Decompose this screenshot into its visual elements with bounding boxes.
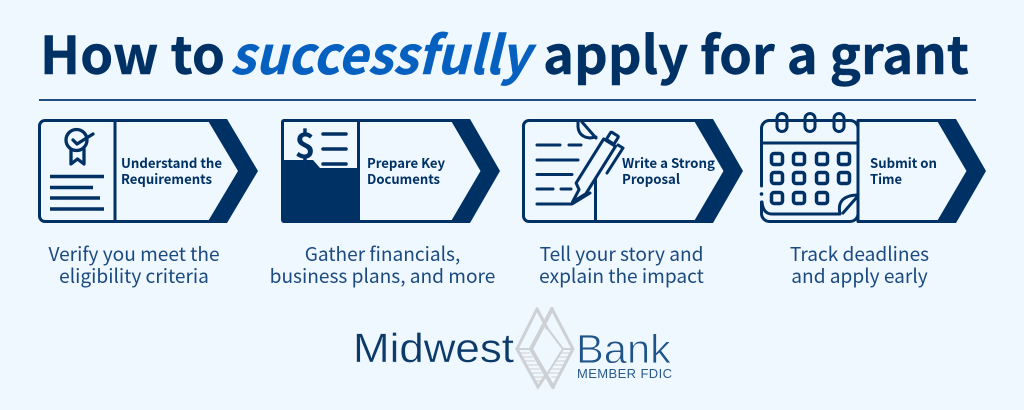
- label: understand the requirements: Requirements: [121, 168, 212, 188]
- arrow: step 3 chevron: [693, 119, 743, 223]
- caption: gather financials: Gather financials,: [305, 239, 460, 267]
- label: write a strong proposal: Write a Strong: [622, 152, 715, 172]
- panel: understand the requirements: [40, 119, 258, 223]
- title: apply for a grant: [543, 14, 969, 89]
- arrow: step 2 chevron: [450, 119, 500, 223]
- caption: tell your story: Tell your story and: [540, 239, 703, 267]
- panel: write a strong proposal: [524, 119, 743, 223]
- icon: document and pen: [537, 122, 623, 206]
- logo mark: double diamond: [517, 309, 573, 387]
- logo: Midwest Bank: Bank: [576, 326, 672, 372]
- label: submit on time: Time: [870, 168, 902, 188]
- icon: folder with dollar document: $: [295, 118, 315, 169]
- label: write a strong proposal: Proposal: [622, 168, 680, 188]
- icon: certificate with ribbon badge: [50, 130, 104, 209]
- caption: verify eligibility: eligibility criteria: [59, 261, 209, 289]
- caption: track deadlines: Track deadlines: [790, 239, 929, 267]
- label: understand the requirements: Understand the: [121, 152, 222, 172]
- title: successfully: [230, 14, 537, 89]
- panel: prepare key documents: [281, 118, 500, 223]
- title: [40, 14, 969, 89]
- icon: calendar: [760, 114, 858, 222]
- logo: Midwest Bank: MEMBER FDIC: [577, 366, 672, 381]
- caption: verify eligibility: Verify you meet the: [48, 239, 220, 267]
- icon: folder with dollar document: [281, 118, 360, 223]
- logo: Midwest Bank: Midwest: [353, 325, 514, 371]
- caption: track deadlines: and apply early: [791, 261, 928, 289]
- title: How to: [40, 14, 225, 89]
- label: prepare key documents: Prepare Key: [367, 152, 445, 172]
- label: submit on time: Submit on: [870, 152, 937, 172]
- arrow: step 1 chevron: [207, 119, 258, 223]
- caption: gather financials: business plans, and more: [270, 261, 495, 289]
- panel: submit on time: [760, 114, 986, 223]
- label: prepare key documents: Documents: [367, 168, 440, 188]
- logo: Midwest Bank: [353, 309, 672, 387]
- caption: tell your story: explain the impact: [539, 261, 704, 289]
- arrow: step 4 chevron: [936, 119, 986, 223]
